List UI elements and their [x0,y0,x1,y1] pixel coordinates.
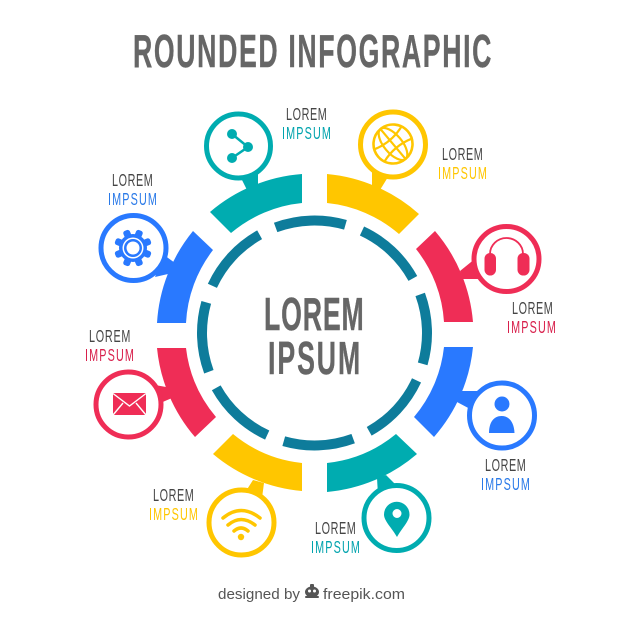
blue left circle [101,216,166,280]
teal connector [240,172,258,192]
icon: gear [114,229,152,267]
red connector [460,258,482,279]
panel: blue left segment [101,171,213,323]
label: red left: IMPSUM [85,346,134,366]
red arc [416,231,473,322]
label: yellow top: LOREM [442,145,483,165]
label: teal top: LOREM [286,105,327,125]
label: teal bottom: LOREM [315,519,356,539]
blue arc [414,347,473,437]
label: red left [85,327,134,366]
center heading: IPSUM [268,332,360,384]
blue connector [457,391,482,410]
icon: freepik mascot [305,584,319,598]
icon: envelope [113,393,146,415]
yellow bottom arc [213,434,302,491]
yellow connector [372,172,388,190]
label: blue right: LOREM [485,456,526,476]
icon: wifi [223,510,260,540]
yellow bottom circle [209,490,274,555]
teal bottom arc [327,434,417,492]
label: red right [507,299,556,338]
red left connector [155,385,172,404]
footer credit: designed by [218,587,301,603]
label: teal bottom [311,519,360,558]
label: yellow bottom: LOREM [153,486,194,506]
icon: headphones [484,238,530,276]
label: blue left: IMPSUM [108,190,157,210]
footer credit [218,584,405,603]
label: red left: LOREM [89,327,130,347]
label: yellow top: IMPSUM [438,164,487,184]
teal bottom circle [364,486,429,550]
label: blue right: IMPSUM [481,475,530,495]
red left circle [96,372,161,437]
label: red right: LOREM [512,299,553,319]
label: teal top [282,105,331,144]
label: yellow bottom: IMPSUM [149,505,198,525]
blue left connector [155,255,175,277]
icon: map pin [384,502,410,537]
title: ROUNDED INFOGRAPHIC [133,25,491,77]
footer credit: freepik.com [323,587,405,603]
red circle [474,226,539,292]
label: teal top: IMPSUM [282,124,331,144]
panel: blue right segment [414,347,534,495]
blue left arc [157,231,213,323]
blue circle [470,383,534,448]
label: blue left: LOREM [112,171,153,191]
label: blue left [108,171,157,210]
teal circle [206,114,270,178]
label: yellow top [438,145,487,184]
panel: teal top segment [206,105,331,233]
panel: yellow bottom segment [149,434,302,555]
icon: person [489,396,514,433]
yellow circle [360,112,426,177]
dashed inner ring [170,189,459,477]
center heading: LOREM [264,288,364,340]
panel: yellow top segment [327,112,487,234]
label: red right: IMPSUM [507,318,556,338]
panel: red right segment [416,226,556,338]
icon: share [227,129,253,163]
panel: teal bottom segment [311,434,429,558]
teal bottom connector [377,475,398,495]
panel: red left segment [85,327,216,437]
label: blue right [481,456,530,495]
label: yellow bottom [149,486,198,525]
label: teal bottom: IMPSUM [311,538,360,558]
center heading [264,288,364,384]
yellow arc [327,174,419,234]
red left arc [157,348,216,437]
yellow bottom connector [246,480,264,498]
icon: globe [366,117,420,171]
teal arc [210,174,302,233]
